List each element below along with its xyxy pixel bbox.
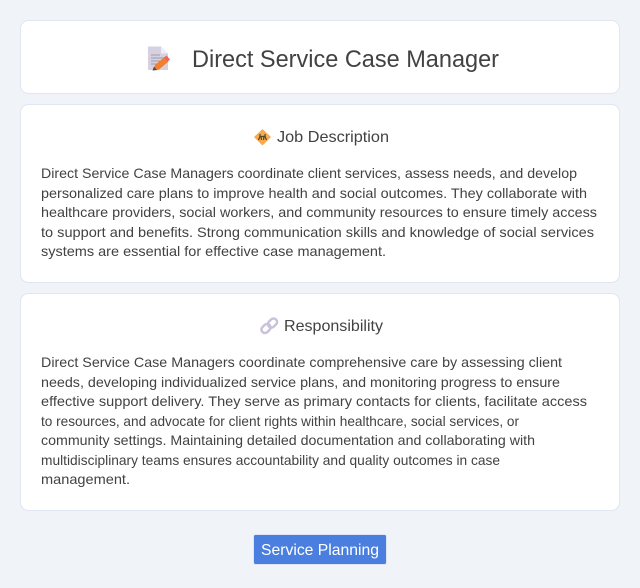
text block: responsibility: community settings. Maintaining detailed documentation and collaborating with — [41, 432, 535, 448]
text block: responsibility — [41, 354, 587, 487]
text block: job description: to support and benefits. Strong communication skills and knowledge of social services — [41, 224, 594, 240]
icon: document with pencil — [148, 46, 170, 70]
text block: job description: systems are essential for effective case management. — [41, 243, 386, 259]
heading: job description: Job Description — [277, 129, 389, 146]
text block: job description: personalized care plans to improve health and social outcomes. They collaborate with — [41, 185, 587, 201]
panel: job description — [20, 104, 620, 282]
button: service planning — [254, 534, 386, 564]
icon: chain link — [260, 317, 279, 335]
text block: responsibility: needs, developing individualized service plans, and monitoring progress to ensure — [41, 374, 560, 390]
text block: job description — [41, 165, 597, 259]
text block: job description: healthcare providers, social workers, and community resources to ensure timely access — [41, 204, 597, 220]
button: service planning: Service Planning — [261, 542, 379, 559]
text block: responsibility: Direct Service Case Managers coordinate comprehensive care by assessing client — [41, 354, 562, 370]
text block: responsibility: multidisciplinary teams ensures accountability and quality outcomes in case — [41, 452, 500, 468]
icon: warning diamond — [255, 130, 270, 144]
text block: job description: Direct Service Case Managers coordinate client services, assess needs, and develop — [41, 165, 577, 181]
title: Direct Service Case Manager — [192, 46, 499, 73]
heading: responsibility: Responsibility — [284, 318, 383, 335]
text block: responsibility: to resources, and advocate for client rights within healthcare, social services, or — [41, 413, 519, 429]
panel: title card — [20, 20, 620, 94]
text block: responsibility: effective support delivery. They serve as primary contacts for clients, facilitate access — [41, 393, 587, 409]
text block: responsibility: management. — [41, 471, 130, 487]
panel: responsibility — [20, 294, 620, 510]
